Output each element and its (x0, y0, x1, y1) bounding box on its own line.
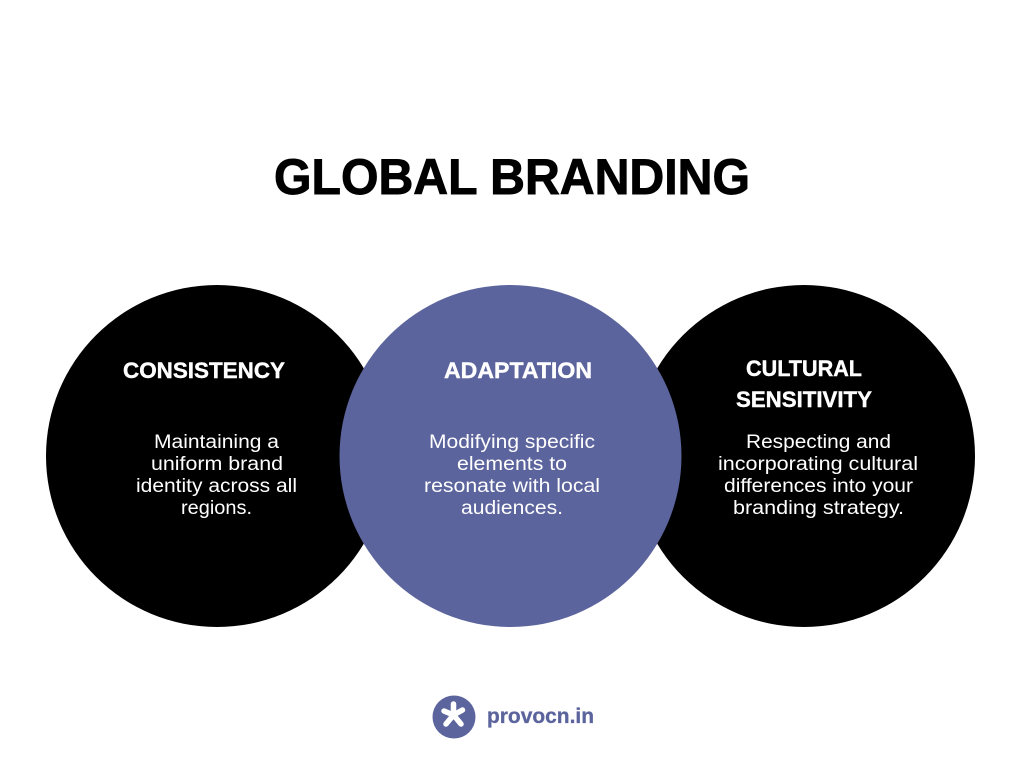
text block: consistency description: Maintaining a (154, 432, 279, 453)
panel: cultural sensitivity circle (633, 285, 975, 627)
text block: consistency description: regions. (181, 498, 252, 519)
icon: asterisk badge (432, 696, 476, 738)
text block: cultural sensitivity description (718, 432, 918, 519)
heading: cultural sensitivity (736, 356, 872, 412)
text block: adaptation description: resonate with local (424, 476, 600, 497)
heading: adaptation: ADAPTATION (444, 358, 592, 383)
text block: cultural sensitivity description: incorporating cultural (718, 454, 918, 475)
panel: consistency circle (46, 285, 388, 627)
heading: cultural sensitivity: CULTURAL (746, 356, 862, 381)
title: GLOBAL BRANDING (274, 149, 750, 205)
panel: adaptation circle (340, 285, 682, 627)
text block: adaptation description (424, 432, 600, 519)
footer logo (432, 696, 594, 738)
text block: adaptation description: elements to (457, 454, 567, 475)
text block: consistency description (136, 432, 297, 519)
heading: consistency: CONSISTENCY (123, 358, 285, 383)
heading: cultural sensitivity: SENSITIVITY (736, 387, 872, 412)
text block: cultural sensitivity description: Respecting and (746, 432, 891, 453)
text block: consistency description: uniform brand (151, 454, 283, 475)
text block: consistency description: identity across all (136, 476, 297, 497)
text block: adaptation description: Modifying specific (429, 432, 595, 453)
text block: cultural sensitivity description: differences into your (724, 476, 914, 497)
brand name: provocn.in (487, 705, 594, 728)
text block: cultural sensitivity description: branding strategy. (733, 498, 904, 519)
text block: adaptation description: audiences. (461, 498, 563, 519)
